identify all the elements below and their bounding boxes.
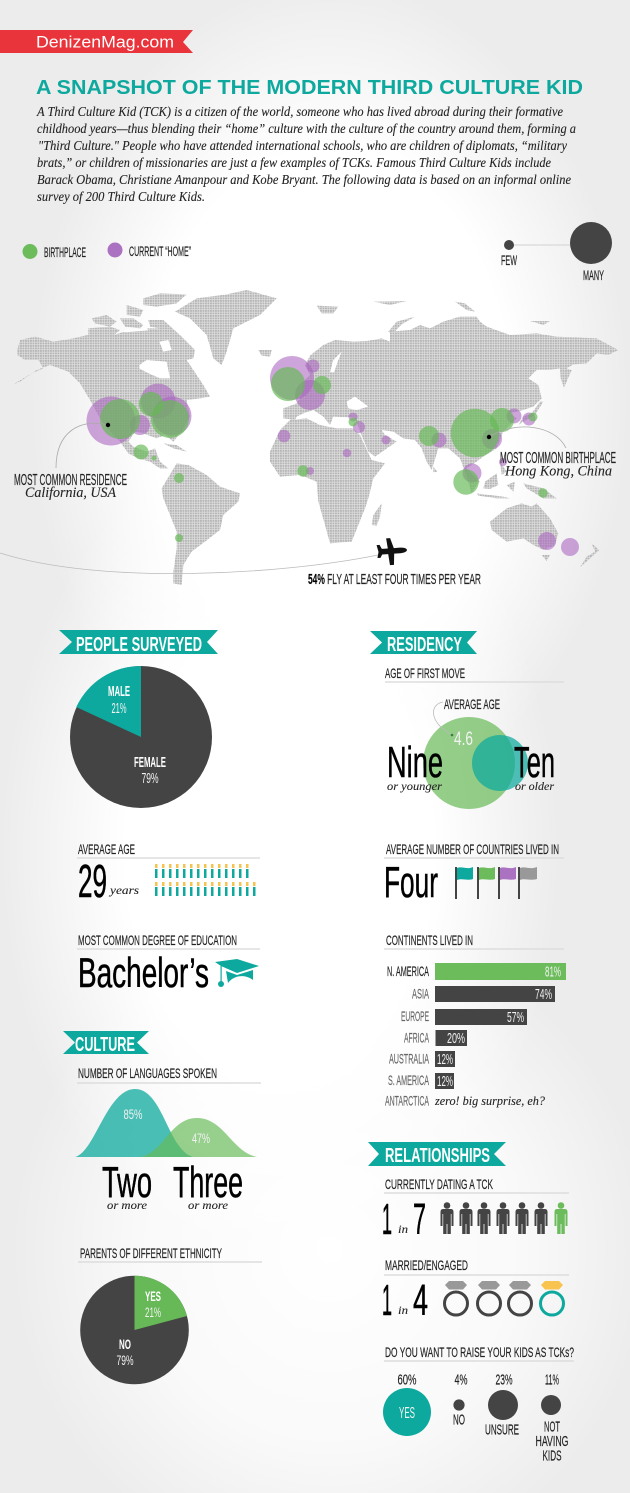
heading: relationships: RELATIONSHIPS: [385, 1144, 490, 1167]
callout: most common birthplace: Hong Kong, China: [504, 464, 612, 480]
bar chart: continents lived in: 74%: [535, 986, 552, 1003]
average age: 29: [78, 855, 107, 907]
age of first move: [385, 665, 564, 809]
age of first move: AVERAGE AGE: [444, 696, 500, 712]
languages spoken chart: 85%: [124, 1106, 142, 1122]
raise kids as TCKs: 4%: [454, 1372, 468, 1388]
countries lived in: Four: [384, 858, 438, 907]
heading: people surveyed: [59, 630, 218, 656]
age of first move: or younger: [387, 779, 442, 793]
bar chart: continents lived in: 12%: [437, 1051, 453, 1068]
pie chart: parents of different ethnicity: 21%: [145, 1304, 161, 1320]
panel: culture: [63, 1031, 262, 1384]
average age: years: [109, 883, 139, 897]
panel: residency: [370, 631, 566, 1108]
intro text: Barack Obama, Christiane Amanpour and Kobe Bryant. The following data is based on an informal online: [37, 172, 571, 187]
age of first move: AGE OF FIRST MOVE: [385, 665, 465, 681]
bar chart: continents lived in: 20%: [447, 1030, 465, 1047]
panel: people surveyed: [59, 630, 260, 996]
icon: rings: [444, 1281, 564, 1315]
icon: airplane: [376, 537, 408, 566]
callout: most common birthplace: [487, 427, 616, 480]
pie chart: parents of different ethnicity: 79%: [116, 1352, 134, 1368]
flight stat: 54% FLY AT LEAST FOUR TIMES PER YEAR: [308, 571, 481, 588]
average age: [77, 841, 260, 907]
bar chart: continents lived in: EUROPE: [401, 1008, 429, 1024]
world dot map: [13, 290, 618, 585]
brand ribbon: [0, 30, 193, 53]
heading: relationships: [368, 1142, 506, 1167]
pie chart: parents of different ethnicity: [78, 1245, 262, 1384]
panel: relationships: [368, 1142, 574, 1464]
bar chart: continents lived in: ANTARCTICA: [385, 1092, 429, 1108]
icon: flags: [456, 867, 537, 899]
intro text: brats,” or children of missionaries are just a few examples of TCKs. Famous Third Culture Kids include: [37, 155, 551, 170]
pie chart: gender: 79%: [142, 771, 159, 787]
legend: size few to many: MANY: [583, 268, 604, 283]
heading: culture: [63, 1031, 149, 1056]
bar chart: continents lived in: CONTINENTS LIVED IN: [386, 932, 473, 948]
raise kids as TCKs: UNSURE: [485, 1422, 519, 1438]
intro text: survey of 200 Third Culture Kids.: [37, 189, 205, 204]
map bubbles: birthplace: [100, 367, 548, 542]
currently dating a TCK: 1: [382, 1195, 392, 1244]
legend: birthplace and current home: [22, 242, 191, 260]
title: A SNAPSHOT OF THE MODERN THIRD CULTURE KID: [36, 77, 583, 99]
married or engaged: in: [398, 1303, 408, 1317]
degree of education: Bachelor’s: [78, 949, 209, 996]
languages spoken chart: [75, 1065, 261, 1212]
married or engaged: MARRIED/ENGAGED: [385, 1257, 468, 1273]
languages spoken chart: or more: [107, 1198, 148, 1212]
legend: size few to many: [501, 222, 612, 283]
callout: most common residence: MOST COMMON RESIDENCE: [14, 472, 127, 489]
age of first move: 4.6: [454, 729, 473, 750]
bar chart: continents lived in: ASIA: [412, 986, 429, 1002]
raise kids as TCKs: HAVING: [536, 1433, 568, 1450]
callout: most common residence: [14, 423, 127, 501]
pie chart: parents of different ethnicity: YES: [145, 1288, 161, 1304]
languages spoken chart: Three: [173, 1158, 243, 1207]
pie chart: gender: [70, 666, 212, 808]
intro text: childhood years—thus blending their “home” culture with the culture of the country around them, forming a: [37, 121, 576, 136]
callout: most common residence: California, USA: [25, 485, 117, 501]
languages spoken chart: Two: [102, 1158, 152, 1207]
intro text: A Third Culture Kid (TCK) is a citizen of the world, someone who has lived abroad during their formative: [36, 104, 563, 119]
pie chart: gender: FEMALE: [134, 755, 166, 771]
icon: candles: [155, 864, 256, 896]
flight path: [0, 553, 378, 574]
pie chart: gender: 21%: [112, 701, 127, 717]
languages spoken chart: NUMBER OF LANGUAGES SPOKEN: [78, 1065, 217, 1081]
married or engaged: 4: [413, 1276, 428, 1325]
bar chart: continents lived in: 57%: [507, 1009, 524, 1026]
bar chart: continents lived in: 12%: [437, 1073, 453, 1090]
bar chart: continents lived in: AFRICA: [404, 1030, 429, 1046]
legend: size few to many: FEW: [501, 253, 517, 268]
icon: people: [440, 1202, 568, 1234]
heading: people surveyed: PEOPLE SURVEYED: [76, 634, 202, 656]
average age: AVERAGE AGE: [78, 841, 135, 857]
currently dating a TCK: [382, 1176, 569, 1244]
age of first move: or older: [515, 779, 554, 793]
age of first move: Ten: [514, 738, 555, 787]
pie chart: gender: MALE: [108, 684, 130, 700]
bar chart: continents lived in: AUSTRALIA: [389, 1050, 429, 1066]
intro text: [36, 104, 576, 204]
currently dating a TCK: in: [398, 1222, 408, 1236]
age of first move: Nine: [387, 738, 443, 787]
raise kids as TCKs: YES: [399, 1405, 415, 1422]
bar chart: continents lived in: zero! big surprise, eh?: [434, 1093, 545, 1108]
languages spoken chart: or more: [188, 1198, 229, 1212]
map bubbles: current home: [86, 356, 579, 556]
bar chart: continents lived in: N. AMERICA: [387, 963, 429, 979]
raise kids as TCKs: KIDS: [542, 1448, 562, 1464]
heading: residency: RESIDENCY: [387, 634, 462, 656]
married or engaged: [382, 1257, 569, 1325]
raise kids as TCKs: [383, 1344, 574, 1464]
pie chart: parents of different ethnicity: PARENTS OF DIFFERENT ETHNICITY: [80, 1245, 222, 1261]
bar chart: continents lived in: [384, 932, 566, 1108]
raise kids as TCKs: 11%: [545, 1372, 559, 1388]
degree of education: [77, 932, 260, 996]
languages spoken chart: 47%: [192, 1130, 210, 1146]
raise kids as TCKs: NOT: [544, 1418, 560, 1436]
currently dating a TCK: 7: [413, 1195, 426, 1244]
icon: graduation cap: [215, 959, 259, 987]
currently dating a TCK: CURRENTLY DATING A TCK: [385, 1176, 493, 1192]
degree of education: MOST COMMON DEGREE OF EDUCATION: [78, 932, 237, 948]
legend: birthplace and current home: BIRTHPLACE: [44, 245, 86, 260]
pie chart: parents of different ethnicity: NO: [119, 1336, 131, 1352]
brand ribbon: DenizenMag.com: [36, 34, 174, 52]
raise kids as TCKs: NO: [453, 1412, 465, 1428]
bar chart: continents lived in: 81%: [545, 964, 561, 980]
intro text: "Third Culture." People who have attended international schools, who are children of diplomats, “military: [38, 138, 567, 153]
raise kids as TCKs: 60%: [398, 1372, 417, 1388]
heading: culture: CULTURE: [75, 1034, 135, 1056]
legend: birthplace and current home: CURRENT “HOME”: [129, 244, 191, 259]
raise kids as TCKs: 23%: [496, 1372, 513, 1388]
heading: residency: [370, 631, 477, 656]
bar chart: continents lived in: S. AMERICA: [388, 1072, 429, 1088]
married or engaged: 1: [382, 1276, 392, 1325]
countries lived in: [384, 841, 564, 907]
